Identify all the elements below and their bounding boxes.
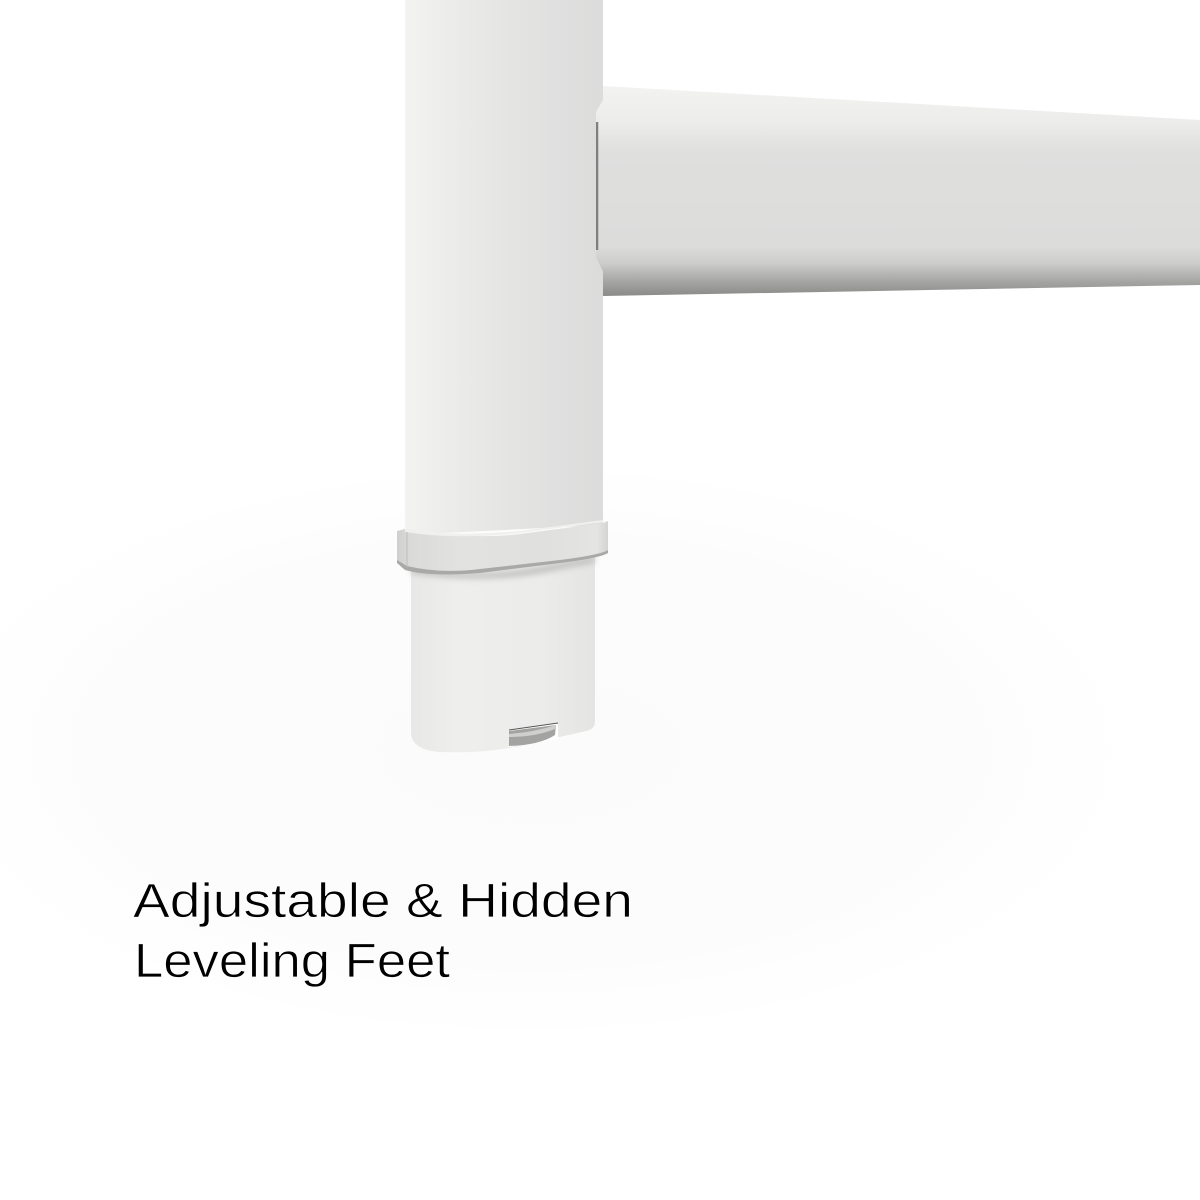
collar ring	[397, 520, 608, 574]
adjuster notch	[509, 723, 558, 747]
caption	[133, 875, 633, 988]
vertical post	[405, 0, 603, 535]
shadow under ring	[411, 556, 595, 579]
lower foot	[411, 552, 595, 752]
horizontal arm tube	[596, 86, 1200, 296]
caption line 2: Leveling Feet	[134, 935, 450, 988]
caption line 1: Adjustable & Hidden	[133, 875, 633, 928]
floor shadow glow	[0, 460, 1130, 1040]
arm joint shadow line	[596, 122, 598, 250]
